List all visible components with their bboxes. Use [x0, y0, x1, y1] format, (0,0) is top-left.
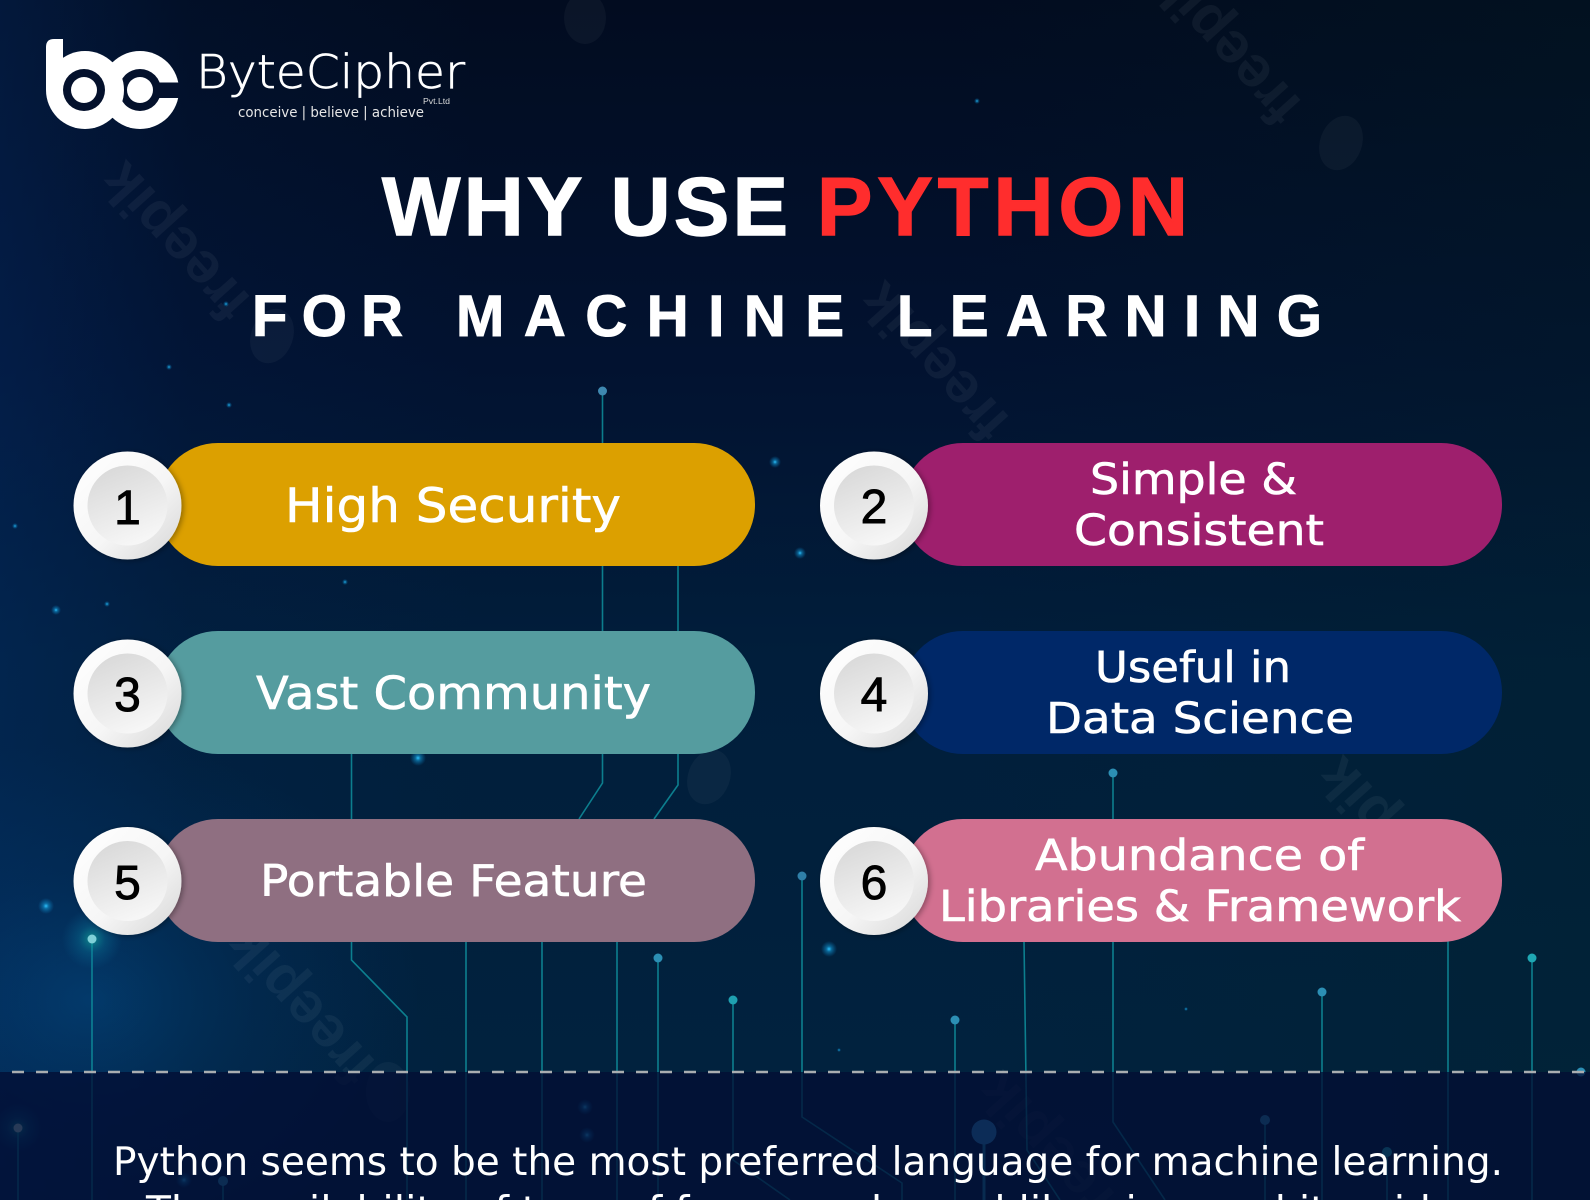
item 5: portable feature: Portable Feature [260, 856, 647, 907]
logo tagline: conceive | believe | achieve [238, 105, 424, 121]
item 1: high security: High Security [285, 479, 621, 534]
item 6: abundance of libraries and framework: Abundance of [1035, 831, 1365, 881]
item 2: simple and consistent: Consistent [1074, 506, 1324, 556]
watermarks: freepik [846, 269, 1022, 455]
item 4: useful in data science [820, 631, 1502, 754]
logo wordmark: ByteCipher [196, 45, 465, 99]
item 3: vast community [74, 631, 755, 754]
title: python: PYTHON [817, 160, 1188, 253]
item 3: vast community: Vast Community [256, 667, 651, 720]
item 6: abundance of libraries and framework [820, 819, 1502, 942]
item 4: useful in data science: 4 [861, 669, 887, 722]
item 2: simple and consistent: Simple & [1090, 455, 1297, 505]
item 6: abundance of libraries and framework: Libraries & Framework [939, 882, 1461, 932]
bottom darkened band [0, 1072, 1590, 1200]
watermarks: freepik [87, 149, 263, 335]
subtitle: FOR [252, 284, 403, 349]
circuit lines [18, 392, 1532, 1200]
item 3: vast community: 3 [114, 669, 141, 722]
logo [46, 39, 465, 129]
title [382, 160, 1188, 253]
description text: Python seems to be the most preferred language for machine learning. [113, 1140, 1503, 1185]
item 6: abundance of libraries and framework: 6 [861, 857, 887, 910]
item 5: portable feature: 5 [114, 857, 141, 910]
item 2: simple and consistent [820, 443, 1502, 566]
subtitle: LEARNING [897, 284, 1322, 349]
dashed divider [12, 1071, 1590, 1073]
item 1: high security: 1 [114, 482, 141, 535]
item 2: simple and consistent: 2 [861, 481, 887, 534]
logo mark [46, 39, 180, 129]
item 1: high security [74, 443, 755, 566]
subtitle: MACHINE [456, 284, 844, 349]
item 4: useful in data science: Useful in [1095, 643, 1291, 693]
title: why use: WHY USE [382, 160, 788, 253]
watermarks: freepik [212, 913, 388, 1099]
item 4: useful in data science: Data Science [1046, 694, 1354, 744]
item 5: portable feature [74, 819, 755, 942]
watermarks: freepik [1304, 744, 1480, 930]
subtitle [252, 284, 1322, 349]
logo suffix: Pvt.Ltd [423, 97, 450, 106]
